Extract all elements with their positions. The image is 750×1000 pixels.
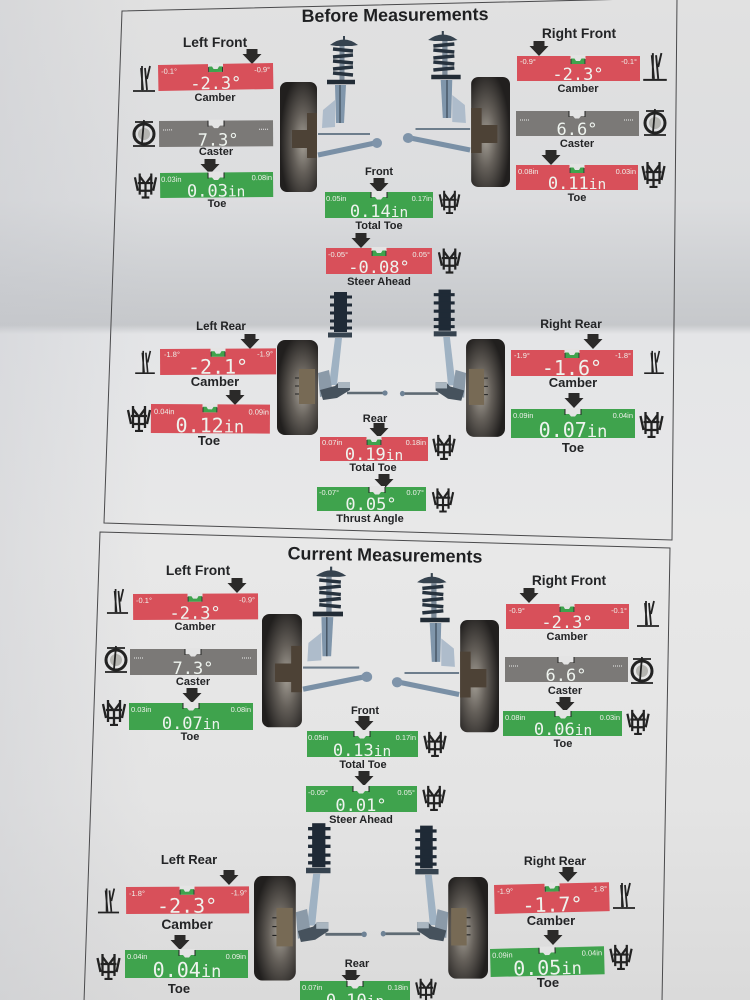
label: left rear: Left Rear — [196, 321, 246, 333]
arrow: right rear toe — [564, 393, 584, 408]
icon: total toe — [433, 435, 455, 459]
label: left rear: Left Rear — [161, 852, 217, 867]
icon: toe — [128, 406, 150, 431]
icon: camber — [643, 53, 667, 80]
arrow: left rear camber — [220, 870, 238, 885]
label: caster: Caster — [548, 685, 583, 697]
gauge: steer ahead — [326, 247, 432, 278]
arrow: steer ahead — [354, 771, 374, 786]
arrow: front total toe — [370, 178, 388, 193]
gauge: right front toe — [503, 710, 622, 740]
panel: before measurements — [104, 0, 677, 540]
arrow: right rear camber — [584, 334, 602, 349]
arrow: left rear toe — [226, 390, 244, 405]
gauge: right front toe: 0.06in — [534, 720, 592, 740]
gauge: right rear camber: -1.8° — [591, 884, 607, 894]
heading: current measurements: Current Measurements — [287, 543, 483, 567]
gauge: right front caster — [505, 656, 628, 686]
label: steer ahead: Steer Ahead — [347, 276, 411, 288]
gauge: rear total toe — [320, 436, 428, 465]
label: camber: Camber — [549, 375, 597, 390]
gauge: left rear camber: -1.8° — [164, 350, 180, 359]
icon: toe — [610, 945, 632, 969]
arrow: right front camber — [520, 588, 538, 603]
gauge: right front camber — [517, 55, 640, 85]
panel outline: before — [104, 0, 677, 540]
gauge: rear total toe: 0.07in — [322, 438, 342, 447]
icon: caster — [644, 109, 666, 135]
gauge: steer ahead: -0.05° — [328, 250, 348, 259]
gauge: rear total toe — [300, 980, 410, 1000]
gauge: right front toe: 0.08in — [518, 167, 538, 176]
gauge: right front caster — [516, 110, 639, 140]
gauge: steer ahead: 0.01° — [335, 796, 387, 816]
arrow: thrust angle — [374, 474, 394, 489]
gauge: left front camber — [158, 62, 274, 95]
gauge: left rear toe: 0.09in — [226, 952, 246, 961]
icon: toe — [103, 700, 125, 725]
gauge: left rear toe — [125, 949, 248, 982]
gauge: left rear camber: -1.9° — [257, 349, 273, 358]
gauge: right rear toe — [511, 408, 635, 442]
gauge: front total toe: 0.17in — [412, 194, 432, 203]
gauge: front total toe: 0.17in — [396, 733, 416, 742]
label: steer ahead: Steer Ahead — [329, 814, 393, 826]
gauge: right front toe: 0.03in — [600, 713, 620, 722]
gauge: right rear camber: -1.9° — [497, 887, 513, 896]
gauge: rear total toe: 0.07in — [302, 983, 322, 992]
arrow: left front camber — [228, 578, 246, 593]
label: right rear: Right Rear — [540, 317, 602, 331]
icon: steer ahead — [439, 248, 460, 272]
icon: thrust angle — [433, 488, 453, 512]
gauge: right rear camber: -1.8° — [615, 351, 631, 360]
gauge: right rear toe — [490, 945, 605, 981]
label: caster: Caster — [199, 146, 234, 158]
gauge: left rear camber: -1.9° — [231, 888, 247, 897]
gauge: left front toe — [129, 702, 253, 734]
arrow: left front toe — [200, 159, 220, 174]
suspension: right rear — [381, 826, 488, 979]
arrow: front total toe — [354, 716, 374, 731]
label: camber: Camber — [527, 913, 575, 928]
label: camber: Camber — [195, 92, 236, 104]
label: toe: Toe — [562, 440, 584, 455]
label: rear: Rear — [363, 413, 388, 425]
gauge: steer ahead: 0.05° — [412, 250, 430, 259]
label: camber: Camber — [547, 631, 588, 643]
gauge: left front camber: -0.9° — [254, 65, 270, 74]
gauge: left front toe: 0.03in — [131, 705, 151, 714]
gauge: left rear camber: -2.1° — [188, 355, 248, 379]
gauge: steer ahead: -0.05° — [308, 788, 328, 797]
gauge: right front toe: 0.08in — [505, 713, 525, 722]
gauge: rear total toe: 0.18in — [388, 983, 408, 992]
label: left front: Left Front — [183, 35, 248, 50]
label: toe: Toe — [537, 975, 559, 990]
label: caster: Caster — [176, 676, 211, 688]
gauge: steer ahead: 0.05° — [397, 788, 415, 797]
gauge: rear total toe: 0.18in — [406, 438, 426, 447]
gauge: front total toe — [325, 191, 433, 222]
arrow: left rear camber — [240, 334, 260, 349]
gauge: right rear toe: 0.09in — [492, 950, 513, 960]
gauge: thrust angle: -0.07° — [319, 488, 339, 497]
gauge: right front camber: -0.9° — [509, 606, 525, 615]
gauge: right front caster: 6.6° — [557, 120, 597, 140]
icon: steer ahead — [423, 786, 445, 810]
gauge: right rear camber — [494, 881, 610, 918]
gauge: left front camber — [133, 592, 258, 624]
label: rear: Rear — [345, 958, 370, 970]
gauge: front total toe — [307, 730, 418, 761]
arrow: right front toe — [556, 697, 574, 712]
gauge: right front camber: -0.1° — [611, 606, 627, 615]
label: toe: Toe — [568, 192, 586, 204]
arrow: right front camber — [530, 41, 548, 56]
icon: camber — [133, 66, 155, 91]
icon: camber — [644, 351, 664, 373]
gauge: right front camber: -2.3° — [552, 65, 604, 85]
gauge: left rear toe: 0.09in — [248, 408, 269, 417]
icon: caster — [133, 120, 155, 146]
gauge: left front toe — [160, 171, 273, 202]
label: left front: Left Front — [166, 563, 231, 578]
suspension: right front — [403, 31, 510, 187]
label: thrust angle: Thrust Angle — [336, 513, 404, 525]
label: right rear: Right Rear — [524, 854, 586, 868]
gauge: right front caster: 6.6° — [546, 666, 586, 686]
arrow: left front toe — [182, 688, 202, 703]
label: total toe: Total Toe — [355, 220, 403, 232]
icon: toe — [98, 954, 120, 979]
label: front: Front — [351, 705, 379, 717]
icon: caster — [631, 657, 653, 683]
label: toe: Toe — [181, 731, 199, 743]
label: right front: Right Front — [532, 573, 607, 588]
gauge: left front toe: 0.08in — [252, 173, 272, 182]
suspension: right front — [392, 573, 499, 732]
gauge: rear total toe: 0.19in — [345, 445, 403, 465]
label: total toe: Total Toe — [339, 759, 387, 771]
label: toe: Toe — [198, 433, 220, 448]
gauge: left front caster: 7.3° — [173, 659, 213, 679]
suspension: right rear — [400, 290, 505, 437]
arrow: rear total toe — [342, 970, 360, 985]
gauge: left front toe: 0.07in — [162, 714, 220, 734]
gauge: left rear camber: -1.8° — [129, 889, 145, 898]
label: front: Front — [365, 166, 393, 178]
gauge: right front toe: 0.11in — [548, 174, 606, 194]
icon: toe — [135, 173, 156, 198]
heading: before measurements: Before Measurements — [301, 4, 489, 26]
gauge: left rear camber — [126, 885, 249, 918]
gauge: left front toe: 0.03in — [187, 181, 245, 202]
icon: toe — [642, 162, 664, 187]
gauge: right rear camber: -1.6° — [542, 356, 602, 380]
icon: camber — [107, 589, 128, 613]
gauge: right rear camber: -1.9° — [514, 351, 530, 360]
gauge: left front camber: -0.1° — [136, 596, 152, 605]
suspension: left front — [280, 36, 382, 192]
icon: total toe — [440, 191, 459, 213]
gauge: left rear toe: 0.04in — [127, 952, 147, 961]
label: camber: Camber — [175, 621, 216, 633]
icon: toe — [640, 412, 662, 437]
gauge: right rear toe: 0.04in — [582, 948, 602, 958]
gauge: left front camber: -0.9° — [239, 595, 255, 604]
gauge: right front camber: -2.3° — [541, 613, 593, 633]
gauge: left front caster — [130, 648, 257, 679]
arrow: left front camber — [242, 49, 262, 64]
gauge: left front caster — [159, 119, 273, 151]
gauge: thrust angle: 0.05° — [345, 495, 397, 515]
gauge: left rear toe: 0.04in — [154, 407, 174, 416]
suspension: left rear — [254, 823, 367, 980]
icon: caster — [105, 646, 127, 672]
gauge: right rear toe: 0.09in — [513, 411, 533, 420]
gauge: right rear camber: -1.7° — [522, 892, 583, 917]
gauge: front total toe: 0.14in — [350, 202, 408, 222]
gauge: left front camber: -2.3° — [169, 604, 221, 624]
gauge: left front caster: 7.3° — [198, 130, 239, 151]
gauge: right rear toe: 0.05in — [513, 955, 582, 980]
label: toe: Toe — [168, 981, 190, 996]
gauge: left rear toe: 0.12in — [175, 413, 244, 437]
gauge: front total toe: 0.05in — [326, 194, 346, 203]
arrow: steer ahead — [352, 233, 370, 248]
gauge: left rear toe: 0.04in — [153, 958, 221, 982]
gauge: left front toe: 0.08in — [231, 705, 251, 714]
icon: total toe — [416, 979, 436, 1000]
gauge: left front camber: -0.1° — [161, 67, 177, 76]
arrow: right front toe — [542, 150, 560, 165]
icon: camber — [613, 883, 635, 908]
gauge: steer ahead: -0.08° — [348, 258, 410, 278]
gauge: left front camber: -2.3° — [190, 74, 242, 94]
gauge: front total toe: 0.13in — [333, 741, 391, 761]
gauge: left front toe: 0.03in — [161, 175, 182, 184]
icon: total toe — [424, 732, 446, 756]
label: toe: Toe — [554, 738, 572, 750]
arrow: left rear toe — [170, 935, 190, 950]
gauge: thrust angle — [317, 486, 426, 515]
gauge: right front toe — [516, 164, 638, 194]
panel outline: current — [84, 532, 670, 1000]
gauge: right front toe: 0.03in — [616, 167, 636, 176]
label: total toe: Total Toe — [349, 462, 397, 474]
gauge: right front camber: -0.9° — [520, 57, 536, 66]
gauge: right front camber: -0.1° — [621, 57, 637, 66]
gauge: front total toe: 0.05in — [308, 733, 328, 742]
gauge: left rear camber — [160, 347, 276, 379]
gauge: right rear toe: 0.07in — [539, 418, 607, 442]
gauge: right rear toe: 0.04in — [613, 411, 633, 420]
icon: camber — [135, 351, 155, 373]
label: right front: Right Front — [542, 26, 617, 41]
gauge: left rear toe — [151, 403, 270, 438]
label: caster: Caster — [560, 138, 595, 150]
label: camber: Camber — [191, 374, 239, 389]
gauge: right front camber — [506, 603, 629, 633]
label: toe: Toe — [208, 198, 226, 210]
label: camber: Camber — [558, 83, 599, 95]
suspension: left rear — [277, 292, 388, 435]
gauge: left rear camber: -2.3° — [157, 894, 217, 918]
icon: camber — [637, 601, 659, 626]
panel: current measurements — [84, 532, 670, 1000]
arrow: right rear camber — [558, 867, 578, 882]
arrow: rear total toe — [370, 423, 388, 438]
label: camber: Camber — [161, 917, 213, 932]
suspension: left front — [262, 567, 372, 727]
gauge: thrust angle: 0.07° — [406, 488, 424, 497]
icon: camber — [98, 889, 119, 912]
arrow: right rear toe — [544, 930, 562, 945]
icon: toe — [627, 710, 649, 734]
gauge: right rear camber — [511, 349, 633, 380]
gauge: steer ahead — [306, 785, 417, 816]
